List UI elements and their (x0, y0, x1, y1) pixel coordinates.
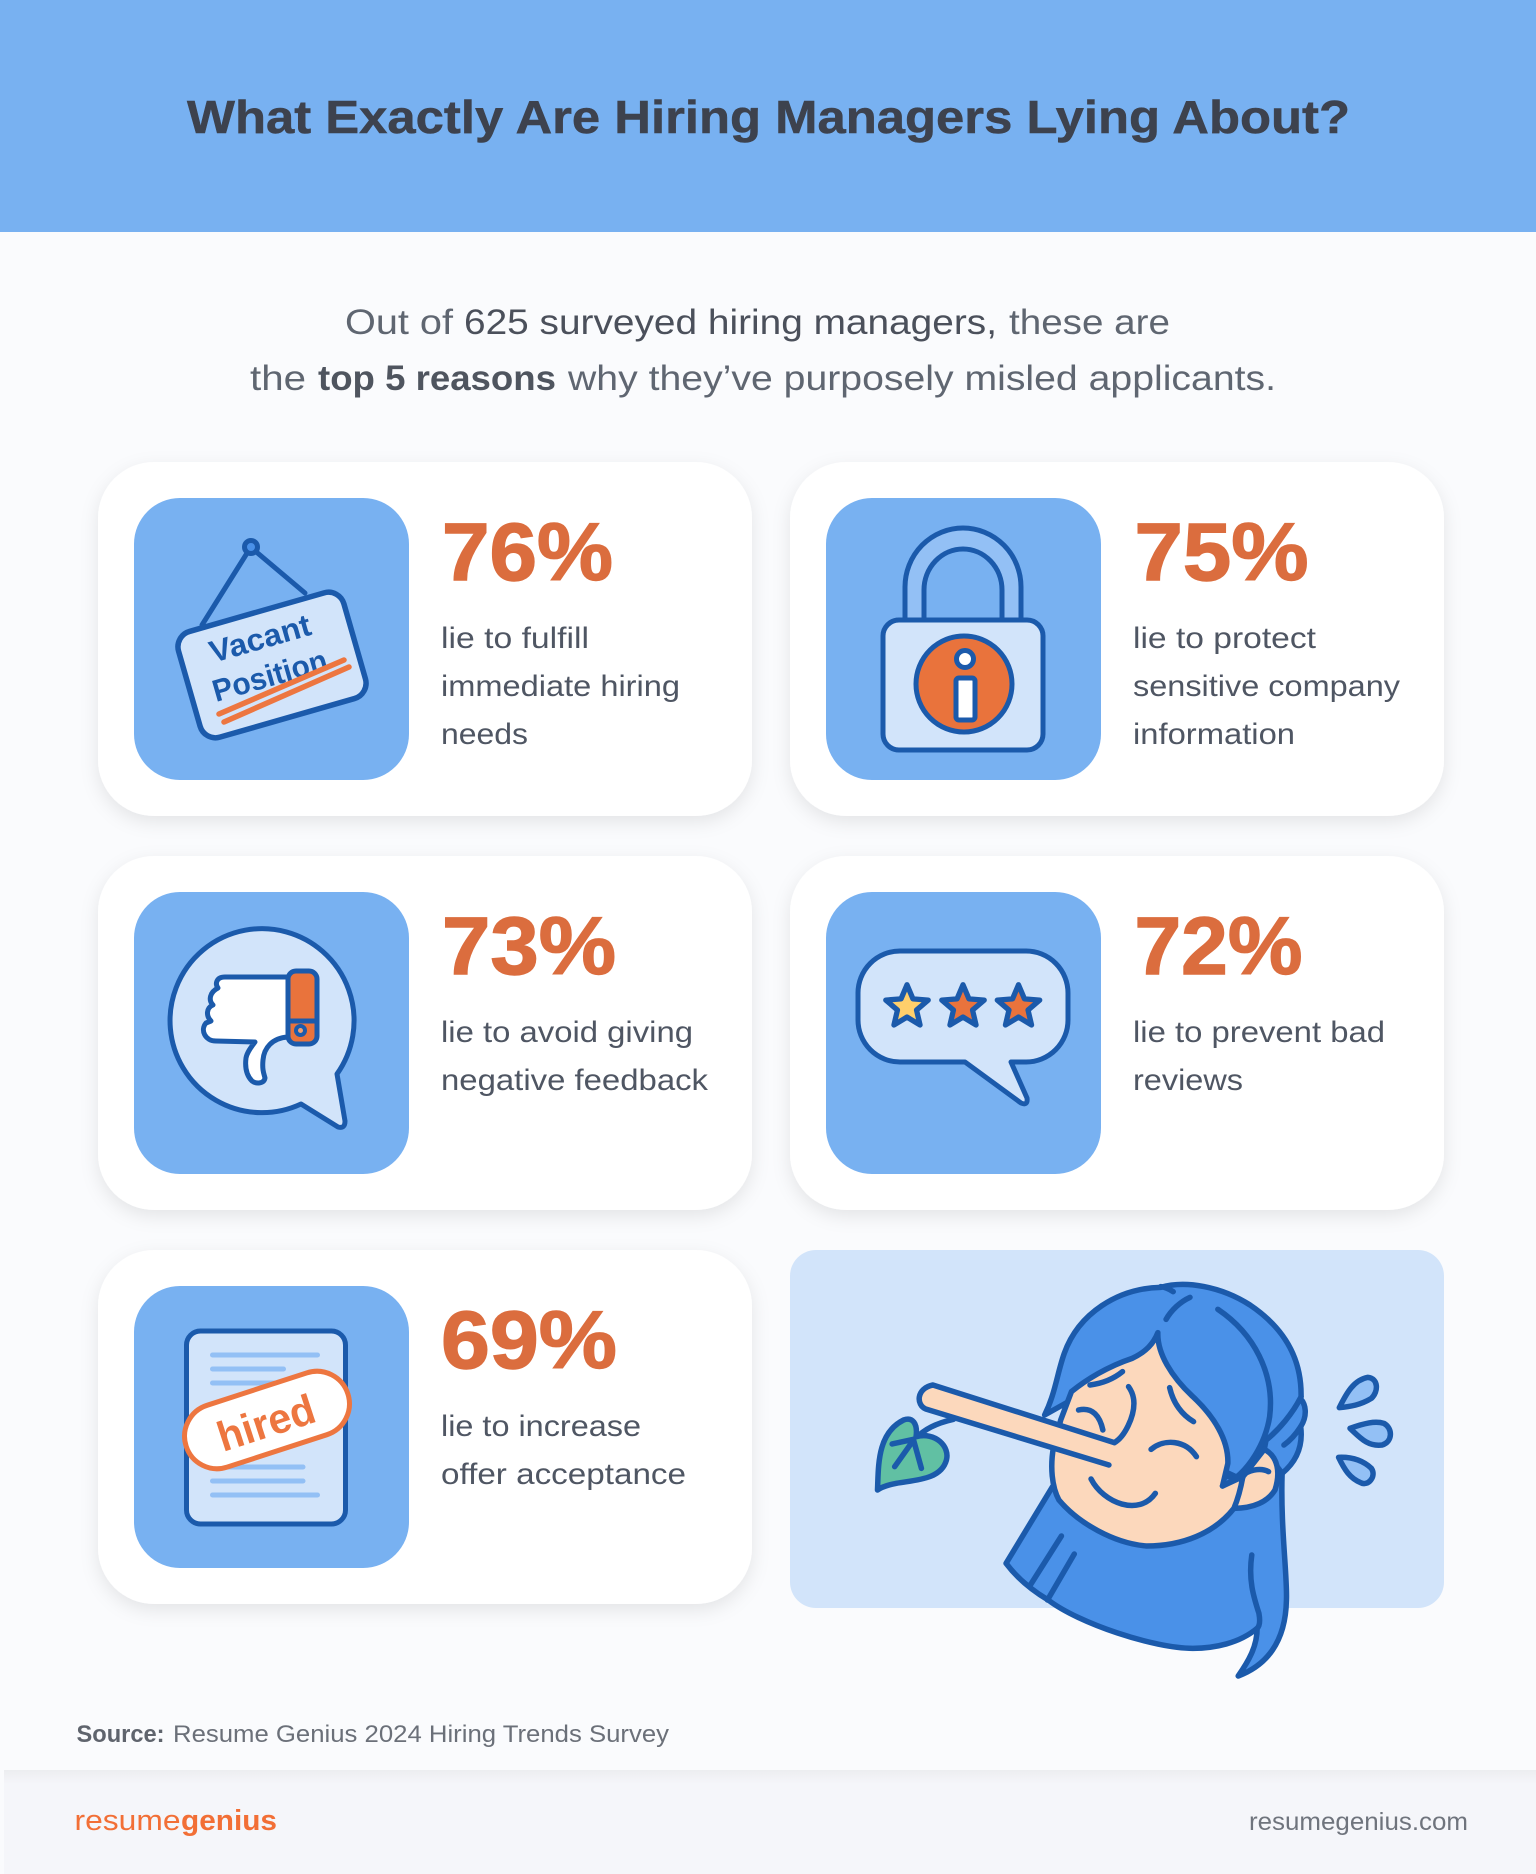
description: reviews (1133, 1064, 1243, 1097)
icon: vacant position sign (174, 540, 370, 742)
leaf stem (916, 1419, 954, 1438)
panel: 73% avoid negative feedback (98, 856, 752, 1210)
panel: 69% increase offer acceptance (98, 1250, 752, 1604)
description: immediate hiring (441, 670, 680, 703)
panel: 75% protect company information (790, 462, 1444, 816)
website url: resumegenius.com (1249, 1808, 1468, 1836)
ear (1234, 1449, 1278, 1508)
description: negative feedback (441, 1064, 709, 1097)
nose bridge (1114, 1387, 1134, 1443)
description: lie to increase (441, 1410, 641, 1443)
description: needs (441, 718, 528, 751)
description: lie to prevent bad (1133, 1016, 1385, 1049)
icon: vacant position sign: Position (208, 643, 331, 709)
illustration: character with long nose (877, 1284, 1390, 1676)
icon: three stars speech bubble (858, 951, 1068, 1104)
panel: 72% prevent bad reviews (790, 856, 1444, 1210)
icon: thumbs down speech bubble (170, 929, 354, 1127)
logo: resumegenius: genius (181, 1805, 277, 1837)
description (441, 622, 680, 751)
icon: resume stamped hired (176, 1331, 358, 1524)
subtitle: these are (1009, 303, 1170, 342)
icon: padlock with info symbol (883, 528, 1043, 750)
description: lie to avoid giving (441, 1016, 693, 1049)
description (1133, 1016, 1385, 1097)
description (441, 1016, 709, 1097)
hair crown (1045, 1284, 1301, 1480)
stat: 72%: 72% (1134, 901, 1302, 992)
icon: resume stamped hired: hired (211, 1385, 321, 1461)
description (1133, 622, 1400, 751)
header banner (0, 0, 1536, 232)
description (441, 1410, 686, 1491)
icon: vacant position sign: Vacant (205, 607, 315, 670)
facial features (1079, 1372, 1196, 1505)
leaf (877, 1419, 947, 1490)
panel: 76% fulfill hiring needs (98, 462, 752, 816)
description: offer acceptance (441, 1458, 686, 1491)
source note: Source: (76, 1721, 164, 1748)
subtitle: Out of (345, 303, 453, 342)
footer bar (4, 1770, 1536, 1874)
description: sensitive company (1133, 670, 1400, 703)
face (1052, 1333, 1243, 1546)
sweat drops (1339, 1377, 1390, 1484)
subtitle: the (250, 359, 306, 398)
stat: 75%: 75% (1134, 507, 1308, 598)
stat: 69%: 69% (441, 1295, 617, 1386)
subtitle (250, 303, 1276, 398)
panel: illustration background (790, 1250, 1444, 1608)
subtitle: why they’ve purposely misled applicants. (567, 359, 1276, 398)
description: information (1133, 718, 1295, 751)
subtitle: top 5 reasons (318, 359, 556, 398)
logo: resumegenius (74, 1805, 277, 1837)
title: What Exactly Are Hiring Managers Lying About? (187, 91, 1350, 143)
source note: Resume Genius 2024 Hiring Trends Survey (173, 1721, 669, 1748)
hair strands (1030, 1287, 1301, 1628)
logo: resumegenius: resume (74, 1805, 180, 1837)
stat: 76%: 76% (442, 507, 613, 598)
subtitle: 625 surveyed hiring managers, (464, 303, 997, 342)
description: lie to protect (1133, 622, 1317, 655)
long nose (919, 1385, 1114, 1465)
hair back and shoulders (1006, 1473, 1287, 1676)
stat: 73%: 73% (442, 901, 616, 992)
description: lie to fulfill (441, 622, 589, 655)
leaf veins (892, 1439, 921, 1468)
